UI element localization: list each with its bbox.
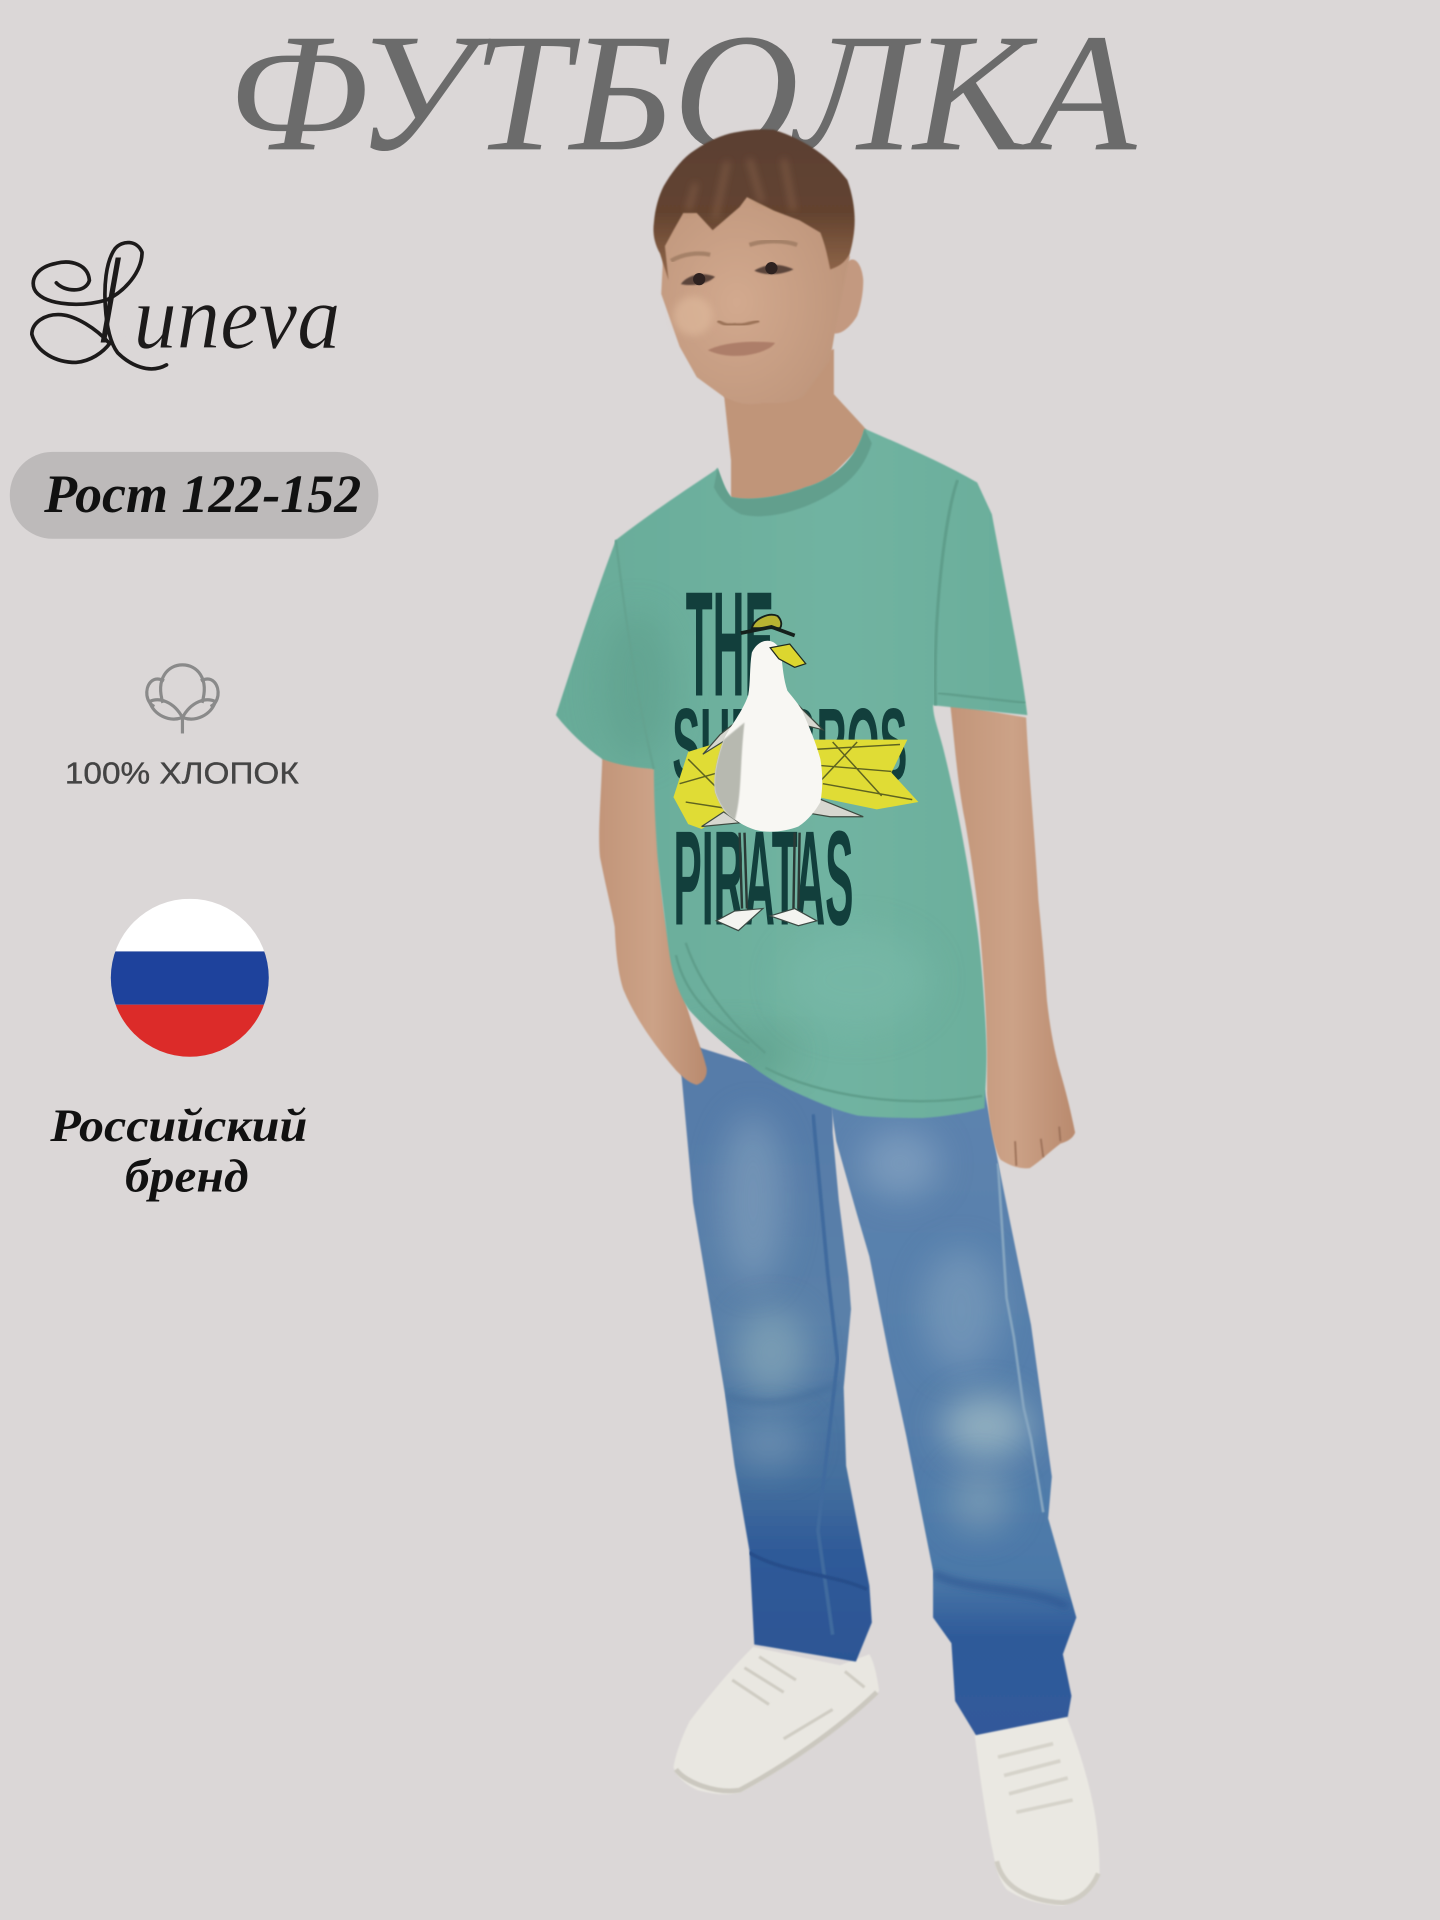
height badge	[10, 452, 378, 539]
brand logo: uneva	[133, 267, 340, 368]
left shoe	[673, 1647, 879, 1794]
face	[661, 178, 850, 404]
sleeve seams	[935, 480, 958, 705]
right shoe	[975, 1717, 1100, 1905]
t-shirt print	[672, 561, 918, 953]
ear	[833, 260, 863, 334]
brand origin text	[49, 1101, 307, 1202]
title: ФУТБОЛКА	[228, 0, 1137, 186]
brand origin text: Российский	[49, 1101, 307, 1152]
surfboard	[673, 740, 735, 829]
collar	[714, 429, 872, 516]
seagull	[702, 615, 863, 931]
boy figure: SURFBROS	[672, 687, 907, 802]
jeans right leg	[827, 1078, 1076, 1735]
brand logo: L	[84, 220, 165, 378]
print lettering	[672, 561, 907, 953]
brand logo	[32, 220, 340, 378]
icon: cotton boll	[147, 665, 218, 733]
right arm and hand	[950, 704, 1075, 1168]
head	[653, 129, 863, 404]
hair highlights	[688, 159, 793, 218]
t-shirt	[556, 429, 1027, 1118]
neck	[724, 349, 871, 504]
eyes	[671, 241, 797, 285]
brand origin text: бренд	[125, 1151, 249, 1202]
infographic canvas	[10, 38, 1137, 1905]
mouth	[708, 342, 775, 356]
boy figure: PIRATAS	[673, 802, 853, 953]
jeans left leg	[678, 1041, 872, 1662]
left arm and hand	[599, 753, 707, 1085]
boy figure	[556, 129, 1100, 1905]
height badge: Рост 122-152	[43, 464, 361, 524]
print lettering: THE	[686, 561, 774, 728]
cotton label: 100% ХЛОПОК	[65, 757, 299, 791]
hair	[653, 129, 855, 280]
nose	[718, 321, 759, 325]
icon: russian flag	[110, 899, 269, 1057]
